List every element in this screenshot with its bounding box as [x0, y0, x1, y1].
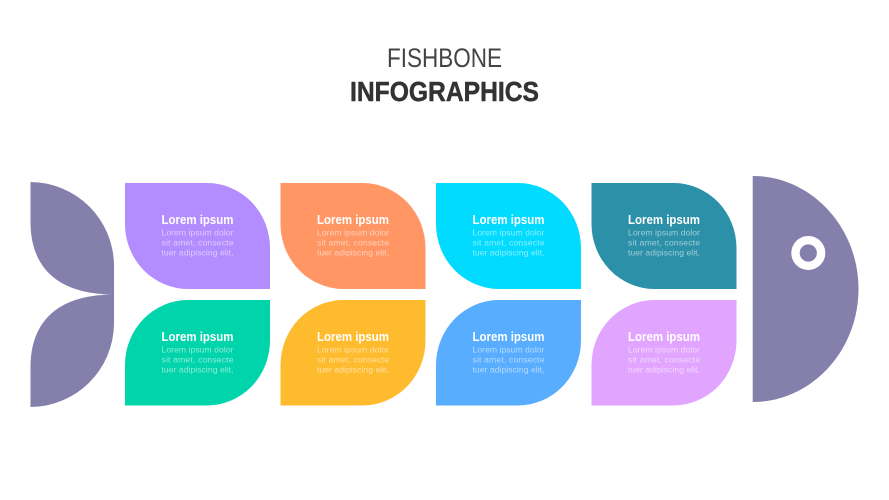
fish tail [30, 182, 114, 407]
panel: pink card: tuer adipiscing elit, [628, 365, 700, 375]
panel: orange card: sit amet, consecte [317, 238, 389, 248]
panel: purple card: sit amet, consecte [162, 238, 234, 248]
title [350, 43, 539, 107]
panel: cyan card: Lorem ipsum [472, 213, 544, 227]
tail: lower fin [30, 294, 114, 407]
panel: yellow card: sit amet, consecte [317, 355, 389, 365]
fish head [753, 176, 858, 402]
panel: teal card: tuer adipiscing elit, [628, 248, 700, 258]
panel: green card: sit amet, consecte [162, 355, 234, 365]
heading: fishbone: FISHBONE [387, 43, 502, 73]
panel: yellow card: tuer adipiscing elit, [317, 365, 389, 375]
panel: teal card [592, 183, 736, 289]
panel: blue card: sit amet, consecte [472, 355, 545, 365]
panel: purple card: Lorem ipsum dolor [162, 228, 234, 238]
panel: green card: Lorem ipsum dolor [162, 345, 234, 355]
panel: yellow card: Lorem ipsum dolor [317, 345, 389, 355]
panel: yellow card [280, 300, 426, 406]
panel: blue card: Lorem ipsum [472, 330, 544, 344]
panel: purple card: tuer adipiscing elit, [162, 248, 234, 258]
panel: orange card: tuer adipiscing elit, [317, 248, 389, 258]
panel: green card [125, 300, 270, 406]
tail: upper fin [30, 182, 114, 294]
panel: purple card [125, 183, 270, 289]
panel: yellow card: Lorem ipsum [317, 330, 389, 344]
panel: green card: tuer adipiscing elit, [162, 365, 234, 375]
heading: infographics: INFOGRAPHICS [350, 76, 539, 107]
panel: pink card: Lorem ipsum [628, 330, 700, 344]
panel: blue card: tuer adipiscing elit, [472, 365, 544, 375]
panel: purple card: Lorem ipsum [162, 213, 234, 227]
panel: cyan card: sit amet, consecte [472, 238, 545, 248]
icon: fish eye [796, 240, 821, 266]
panel: orange card [280, 183, 426, 289]
panel: blue card [436, 300, 581, 406]
panel: orange card: Lorem ipsum [317, 213, 389, 227]
panel: pink card: sit amet, consecte [628, 355, 700, 365]
panel: cyan card: Lorem ipsum dolor [472, 228, 545, 238]
panel: orange card: Lorem ipsum dolor [317, 228, 389, 238]
panel: blue card: Lorem ipsum dolor [472, 345, 545, 355]
panel: green card: Lorem ipsum [162, 330, 234, 344]
panel: teal card: Lorem ipsum [628, 213, 700, 227]
panel: cyan card [436, 183, 581, 289]
panel: pink card [592, 300, 736, 406]
panel: cyan card: tuer adipiscing elit, [472, 248, 544, 258]
panel: pink card: Lorem ipsum dolor [628, 345, 700, 355]
panel: teal card: Lorem ipsum dolor [628, 228, 700, 238]
panel: teal card: sit amet, consecte [628, 238, 700, 248]
